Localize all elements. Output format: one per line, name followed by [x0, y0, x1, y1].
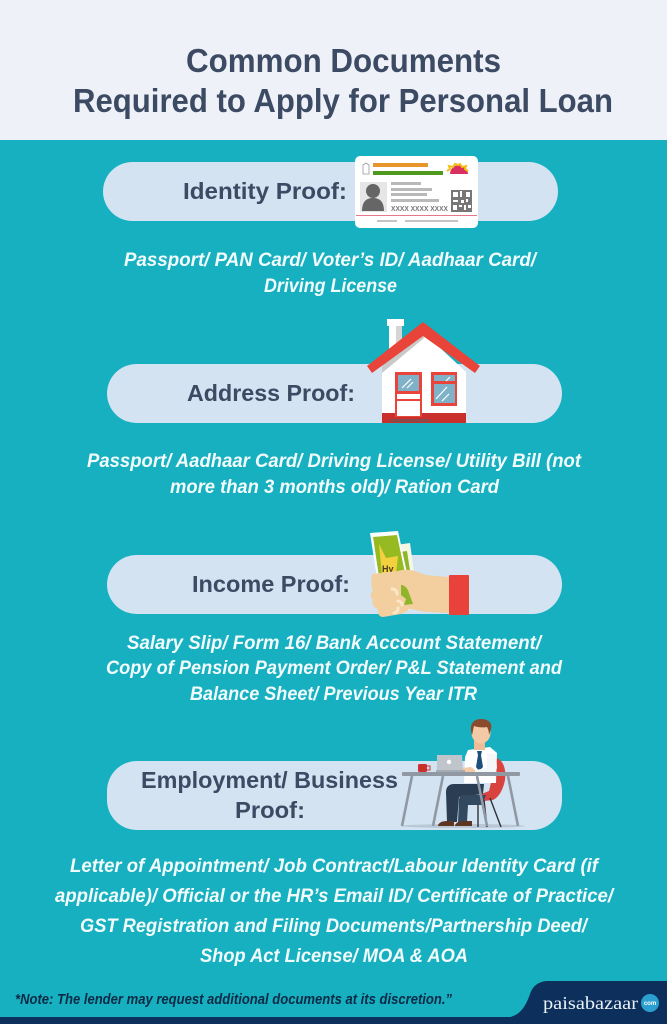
- logo: paisabazaar: com: [644, 1001, 656, 1007]
- panel: identity proof: [103, 156, 558, 228]
- text: employment proof documents: GST Registration and Filing Documents/Partnership Deed/: [80, 915, 589, 937]
- text: identity proof documents: Driving License: [264, 275, 397, 297]
- icon: hand holding cash: [370, 531, 469, 617]
- title header: [0, 0, 667, 140]
- panel: employment / business proof: Employment/ Business: [141, 767, 398, 793]
- text: address proof documents: more than 3 months old)/ Ration Card: [170, 476, 500, 498]
- text: address proof documents: [87, 450, 582, 498]
- text: income proof documents: Copy of Pension Payment Order/ P&L Statement and: [106, 657, 563, 679]
- text: identity proof documents: [124, 249, 538, 297]
- text: identity proof documents: Passport/ PAN Card/ Voter’s ID/ Aadhaar Card/: [124, 249, 538, 271]
- panel: address proof: [107, 319, 562, 423]
- icon: aadhaar card: XXXX XXXX XXXX: [391, 206, 448, 213]
- text: income proof documents: Balance Sheet/ Previous Year ITR: [190, 683, 477, 705]
- text: address proof documents: Passport/ Aadhaar Card/ Driving License/ Utility Bill (not: [87, 450, 582, 472]
- footer bar with logo: [0, 981, 667, 1024]
- text: employment proof documents: applicable)/ Official or the HR’s Email ID/ Certificate of Practice/: [55, 885, 615, 907]
- text: employment proof documents: [55, 855, 615, 967]
- panel: income proof: [107, 531, 562, 617]
- icon: house: [367, 319, 480, 423]
- text: income proof documents: [106, 632, 563, 705]
- icon: man working at desk: [401, 719, 525, 828]
- footnote: *Note: The lender may request additional documents at its discretion.”: [15, 991, 452, 1008]
- panel: identity proof: Identity Proof:: [183, 178, 347, 204]
- icon: aadhaar card: [355, 156, 478, 228]
- text: employment proof documents: Shop Act License/ MOA & AOA: [200, 945, 468, 967]
- title header: Required to Apply for Personal Loan: [73, 82, 613, 119]
- icon: hand holding cash: Hy: [382, 564, 394, 574]
- text: employment proof documents: Letter of Appointment/ Job Contract/Labour Identity Card (if: [70, 855, 600, 877]
- logo: paisabazaar: paisabazaar: [543, 993, 638, 1013]
- panel: income proof: Income Proof:: [192, 571, 350, 597]
- panel: address proof: Address Proof:: [187, 380, 355, 406]
- panel: employment / business proof: [107, 719, 562, 830]
- panel: employment / business proof: Proof:: [235, 797, 305, 823]
- text: income proof documents: Salary Slip/ Form 16/ Bank Account Statement/: [127, 632, 543, 654]
- title header: Common Documents: [186, 42, 501, 79]
